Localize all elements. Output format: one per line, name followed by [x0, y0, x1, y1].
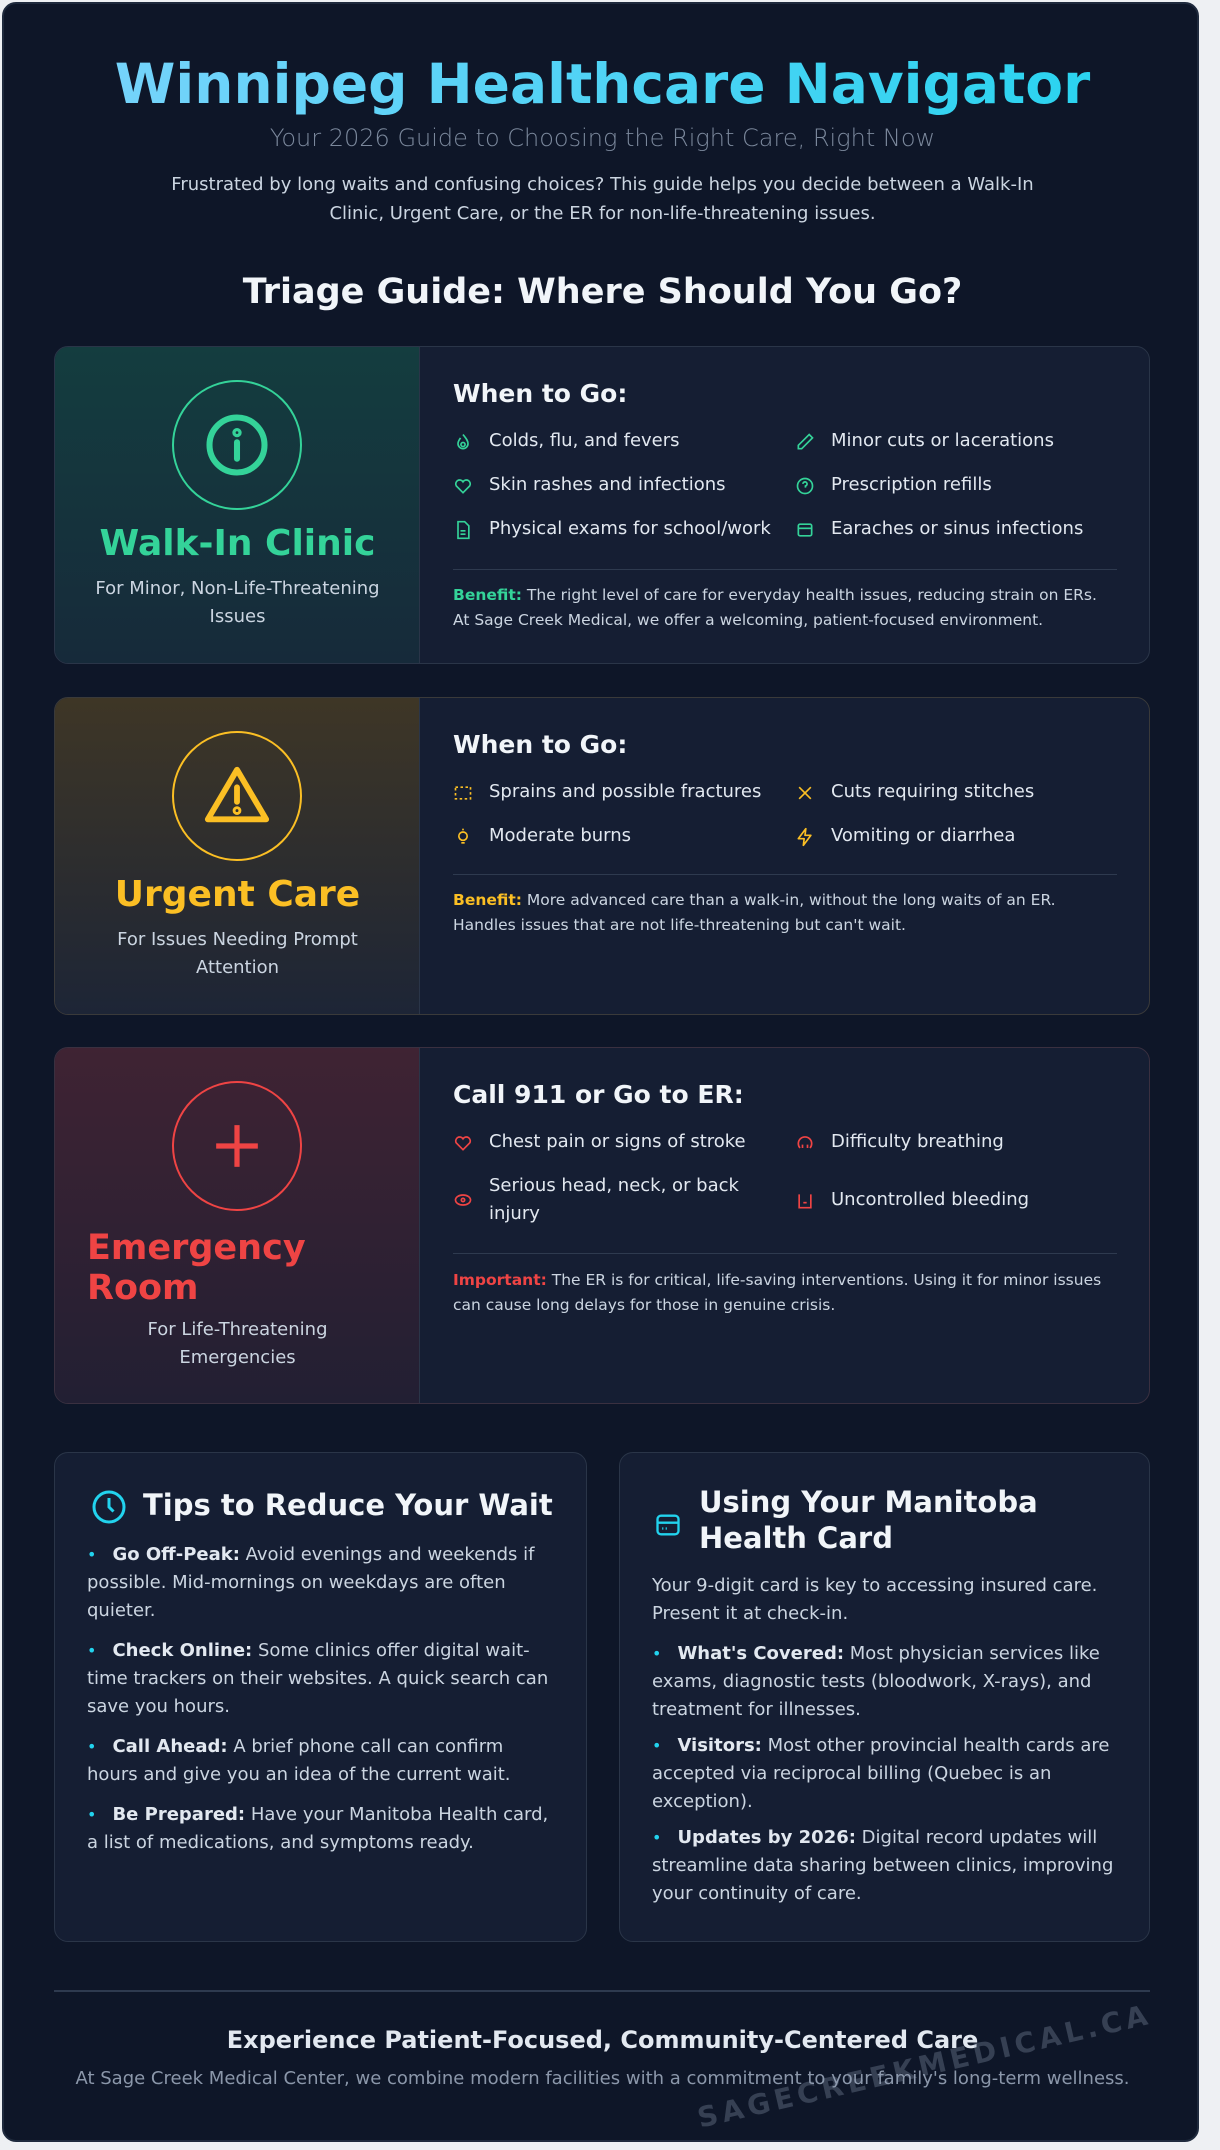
walk-in details [453, 379, 1117, 629]
urgent care details: Moderate burns [489, 825, 631, 846]
tips list [87, 1544, 548, 1853]
section heading: Triage Guide: Where Should You Go? [243, 272, 962, 312]
walk-in details: When to Go: [453, 379, 627, 408]
urgent care left identity: Urgent Care [115, 874, 360, 915]
ER details: Serious head, neck, or back injury [489, 1175, 739, 1224]
ER details: Difficulty breathing [831, 1131, 1004, 1152]
urgent care details: Cuts requiring stitches [831, 781, 1034, 802]
walk-in details: Colds, flu, and fevers [489, 430, 680, 451]
ER left identity [55, 1048, 420, 1403]
walk-in left identity: For Minor, Non-Life-Threatening Issues [95, 578, 380, 627]
footer heading: Experience Patient-Focused, Community-Centered Care [227, 2026, 978, 2054]
panel: walk-in clinic [54, 346, 1150, 664]
walk-in left identity: Walk-In Clinic [100, 523, 375, 564]
walk-in left identity [55, 347, 420, 663]
ER details: Call 911 or Go to ER: [453, 1080, 744, 1109]
urgent care details: Vomiting or diarrhea [831, 825, 1015, 846]
panel: manitoba health card [619, 1452, 1150, 1942]
watermark: SAGECREEKMEDICAL.CA [694, 1998, 1155, 2135]
footer text: At Sage Creek Medical Center, we combine modern facilities with a commitment to your family's long-term wellness. [75, 2068, 1130, 2089]
tips list: Go Off-Peak: Avoid evenings and weekends if possible. Mid-mornings on weekdays are often quieter. [87, 1544, 534, 1621]
panel: emergency room [54, 1047, 1150, 1404]
walk-in details: Physical exams for school/work [489, 518, 771, 539]
walk-in details: Earaches or sinus infections [831, 518, 1083, 539]
health card text: Your 9-digit card is key to accessing insured care. Present it at check-in. [652, 1575, 1097, 1624]
health card text: What's Covered: Most physician services like exams, diagnostic tests (bloodwork, X-rays), and treatment for illnesses. [652, 1643, 1100, 1720]
urgent care details: When to Go: [453, 730, 627, 759]
tips list: Be Prepared: Have your Manitoba Health card, a list of medications, and symptoms ready. [87, 1804, 548, 1853]
ER details: Uncontrolled bleeding [831, 1189, 1029, 1210]
icon: card [656, 1514, 680, 1536]
walk-in details: Benefit: The right level of care for everyday health issues, reducing strain on ERs. At Sage Creek Medical, we offer a welcoming, patient-focused environment. [453, 586, 1097, 629]
ER details [453, 1080, 1117, 1314]
walk-in details: Skin rashes and infections [489, 474, 726, 495]
urgent care left identity [55, 698, 420, 1014]
icon: warning [172, 731, 302, 861]
health card text: Updates by 2026: Digital record updates will streamline data sharing between clinics, improving your continuity of care. [652, 1827, 1113, 1904]
icon: plus [172, 1081, 302, 1211]
title: Winnipeg Healthcare Navigator [115, 52, 1090, 116]
tips list: Call Ahead: A brief phone call can confirm hours and give you an idea of the current wait. [87, 1736, 511, 1785]
subtitle: Your 2026 Guide to Choosing the Right Care, Right Now [270, 124, 935, 152]
walk-in details: Minor cuts or lacerations [831, 430, 1054, 451]
urgent care details: Sprains and possible fractures [489, 781, 761, 802]
icon: clock [92, 1490, 126, 1524]
ER left identity: For Life-Threatening Emergencies [147, 1319, 328, 1368]
panel: tips to reduce wait [54, 1452, 587, 1942]
urgent care left identity: For Issues Needing Prompt Attention [117, 929, 358, 978]
ER left identity: Emergency Room [87, 1228, 306, 1308]
urgent care details [453, 730, 1117, 934]
walk-in details: Prescription refills [831, 474, 992, 495]
health card heading: Using Your Manitoba Health Card [699, 1485, 1038, 1555]
urgent care details: Benefit: More advanced care than a walk-in, without the long waits of an ER. Handles issues that are not life-threatening but can't wait. [453, 891, 1056, 934]
panel: urgent care [54, 697, 1150, 1015]
ER details: Important: The ER is for critical, life-saving interventions. Using it for minor issues can cause long delays for those in genuine crisis. [453, 1271, 1101, 1314]
ER details: Chest pain or signs of stroke [489, 1131, 746, 1152]
icon: info [172, 380, 302, 510]
tips list: Check Online: Some clinics offer digital wait-time trackers on their websites. A quick search can save you hours. [87, 1640, 548, 1717]
health card text: Visitors: Most other provincial health cards are accepted via reciprocal billing (Quebec is an exception). [652, 1735, 1109, 1812]
intro text: Frustrated by long waits and confusing choices? This guide helps you decide between a Walk-In Clinic, Urgent Care, or the ER for non-life-threatening issues. [171, 174, 1034, 224]
health card text [652, 1575, 1113, 1904]
tips heading: Tips to Reduce Your Wait [143, 1488, 553, 1522]
